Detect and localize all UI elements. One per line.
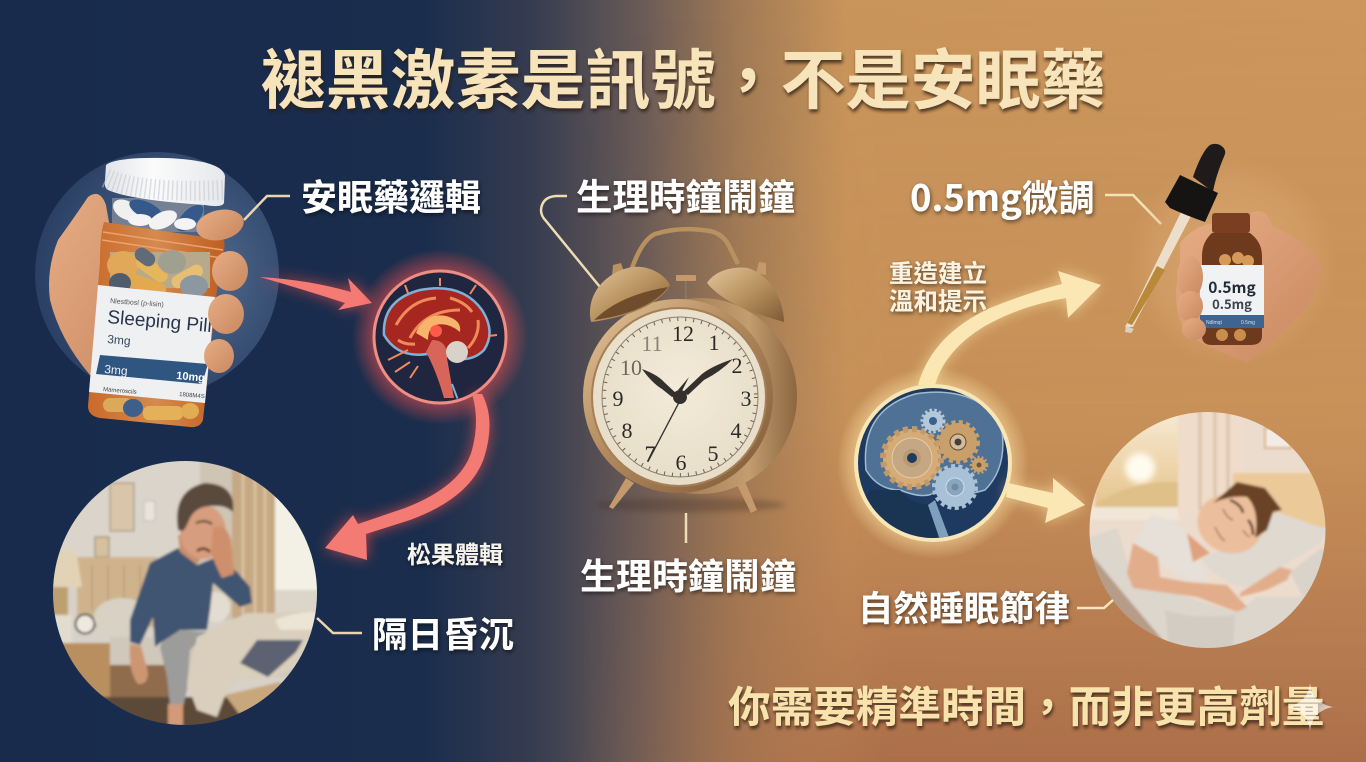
clock numerals: 7 [644,441,656,466]
hammer [676,275,696,299]
label: rebuild gentle cue: 重造建立 [889,260,987,288]
icon: hand holding bottle [1176,211,1322,363]
man: sweater [130,548,252,647]
man: head [177,483,233,565]
clock numerals: 2 [732,353,742,378]
clock numerals [612,321,752,475]
bed frame [76,556,292,700]
clock numerals: 10 [620,355,642,380]
label: sleeping pill logic: 安眠藥邏輯 [301,169,481,221]
panel: groggy man in bedroom [53,461,317,725]
neck [1187,533,1210,562]
arrow: brain to next-day drowsiness [325,394,490,560]
icon: bottle cap [105,158,225,206]
label: 1808M4S [179,392,205,400]
arrow: brain to sleep [1006,478,1085,523]
label: Nlestbosl (ρ-lisin) [110,298,164,309]
clock hands [642,359,733,462]
icon: amber bottle: 0.5mg [1208,276,1256,298]
leader line: clock bottom label [685,513,687,543]
label: circadian alarm clock top: 生理時鐘鬧鐘 [576,168,795,221]
pills lower [103,398,199,420]
icon: amber bottle: 0.5mg [1212,294,1252,313]
clock numerals: 1 [708,330,720,355]
icon: dropper [1125,144,1225,333]
label: 3mg [104,362,128,378]
label: rebuild gentle cue [889,260,987,316]
wall frames [95,483,155,557]
icon: hand palm [49,194,150,375]
label: Mameroscils [103,387,137,396]
title: 褪黑激素是訊號，不是安眠藥 [260,28,1106,122]
clock numerals: 11 [641,331,663,356]
arms [1127,543,1292,612]
leader line: natural sleep rhythm [1077,600,1113,608]
panel: sleeping pill bottle in hand [35,152,279,427]
icon: sparkle [1287,683,1333,731]
clock numerals: 4 [730,418,742,443]
pills upper [107,195,210,299]
blanket [188,612,311,718]
label: 10mg [176,370,205,384]
label: Sleeping Pill [107,307,213,337]
leader line: 0.5mg label [1105,195,1161,224]
icon: amber bottle [1200,213,1264,345]
clock numerals: 6 [676,450,686,475]
pillow [1202,512,1328,587]
clock numerals: 3 [740,386,752,411]
label: natural sleep rhythm: 自然睡眠節律 [858,581,1070,632]
medium brass gear [938,422,978,462]
face and hair [1196,480,1282,554]
lamp [53,550,83,588]
man: hand on face [211,526,234,578]
arrow: brain to dropper [918,271,1101,385]
right bell [707,262,784,322]
clock legs [609,472,757,513]
second pillow and sheet [1290,548,1324,597]
man: trousers [160,630,207,707]
leader line: sleeping pill logic [244,196,290,220]
left bell [590,263,670,322]
leader line: next-day drowsiness [317,618,362,633]
icon: fingers on bottle [1177,256,1206,340]
arrow: pill to brain [260,277,372,310]
icon: amber bottle: Ndlmqt [1206,320,1222,326]
shirt [1133,515,1210,582]
background gradient [448,0,1366,762]
steel gear [934,466,976,508]
small top gear [922,410,944,432]
icon: bottle body [88,195,224,427]
clock numerals: 9 [612,386,624,411]
closing message: 你需要精準時間，而非更高劑量 [728,674,1324,735]
label [89,285,215,403]
panel: peaceful sleeper [1090,412,1326,648]
tiny gear [971,457,987,473]
panel: dropper and 0.5mg bottle in hand [1125,144,1337,367]
icon: fingers [193,205,248,373]
icon: gears in brain circle [837,367,1029,559]
blanket [1090,529,1304,645]
window and sun [1090,416,1180,519]
label: 0.5mg fine tune: 0.5mg微調 [910,169,1095,222]
label: rebuild gentle cue: 溫和提示 [889,288,987,316]
clock numerals: 12 [672,321,694,346]
nightstand and alarm clock [62,612,112,699]
label: pineal gland: 松果體輯 [407,535,503,570]
icon: overactive brain circle [352,249,528,425]
icon: alarm clock [583,229,797,513]
clock handle [632,229,738,268]
label: next-day drowsiness: 隔日昏沉 [372,607,514,658]
clock numerals: 5 [708,441,718,466]
icon: amber bottle: 0.5mg [1241,320,1255,326]
label: circadian alarm clock bottom: 生理時鐘鬧鐘 [580,548,796,600]
label: 3mg [107,332,131,348]
clock numerals: 8 [622,418,632,443]
big brass gear [883,429,941,487]
leader line: clock top label [541,196,600,287]
